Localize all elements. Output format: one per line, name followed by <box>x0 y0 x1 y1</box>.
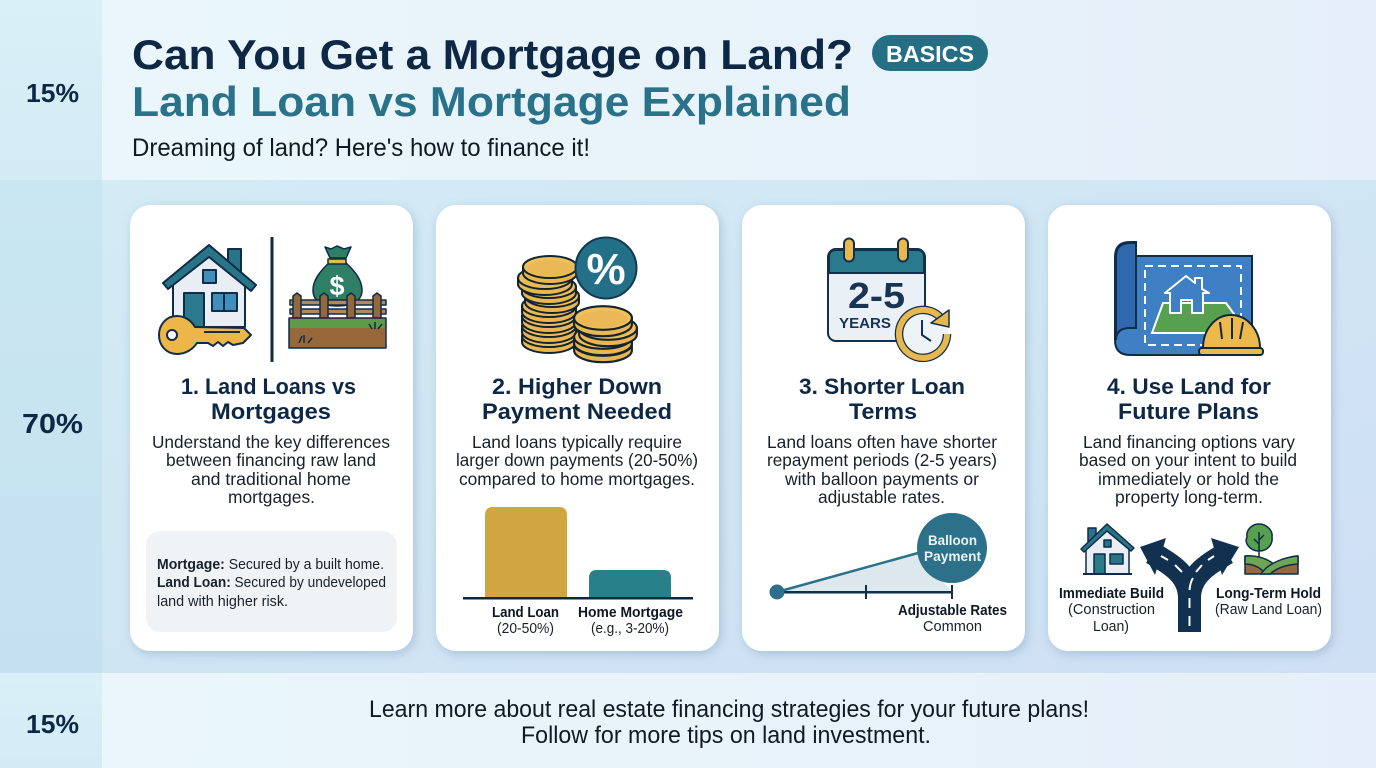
label: long-term hold <box>1215 586 1322 618</box>
icon: money bag on fenced land <box>289 246 386 348</box>
icon: dollar sign: $ <box>329 271 345 301</box>
icon: blueprint with hard hat <box>1115 242 1263 355</box>
bar chart <box>463 507 693 637</box>
card heading: Payment Needed <box>482 399 672 424</box>
card body text: mortgages. <box>228 487 315 507</box>
balloon payment chart <box>770 513 1007 635</box>
share label: footer 15%: 15% <box>26 709 79 739</box>
balloon payment chart: Payment <box>924 548 981 564</box>
card heading: Mortgages <box>211 399 331 424</box>
callout <box>146 531 397 632</box>
panel: land loans vs mortgages <box>130 205 413 651</box>
tagline: Dreaming of land? Here's how to finance it! <box>132 134 590 162</box>
card heading <box>1107 374 1271 424</box>
icon: tree on hills <box>1245 524 1298 574</box>
card heading: 1. Land Loans vs <box>181 374 356 399</box>
card heading: Future Plans <box>1118 399 1259 424</box>
icon: small house <box>1081 524 1134 574</box>
card heading <box>482 374 672 424</box>
card heading <box>799 374 965 424</box>
balloon payment chart: Common <box>923 619 982 635</box>
card body text: property long-term. <box>1115 487 1263 507</box>
footer text: Follow for more tips on land investment. <box>521 722 931 749</box>
icon: percent badge <box>576 238 636 298</box>
card heading: 3. Shorter Loan <box>799 374 965 399</box>
bar chart: (20-50%) <box>497 621 554 637</box>
card body text <box>456 432 698 489</box>
label: immediate build: Loan) <box>1093 619 1129 635</box>
share label: body 70%: 70% <box>22 408 83 439</box>
card body text: with balloon payments or <box>784 469 979 489</box>
panel: shorter loan terms <box>742 205 1025 651</box>
bar chart: (e.g., 3-20%) <box>591 621 669 637</box>
icon: percent badge: % <box>586 245 626 294</box>
callout: Land Loan: Secured by undeveloped <box>157 575 386 591</box>
card body text: repayment periods (2-5 years) <box>767 450 997 470</box>
card body text: larger down payments (20-50%) <box>456 450 698 470</box>
label: immediate build <box>1059 586 1164 635</box>
bar chart: Land Loan <box>492 605 559 621</box>
card body text: and traditional home <box>191 469 351 489</box>
badge: basics: BASICS <box>886 41 974 67</box>
callout: Mortgage: Secured by a built home. <box>157 557 384 573</box>
label: immediate build: (Construction <box>1068 602 1155 618</box>
card heading <box>181 374 356 424</box>
label: immediate build: Immediate Build <box>1059 586 1164 602</box>
footer text: Learn more about real estate financing strategies for your future plans! <box>369 696 1089 723</box>
card body text: adjustable rates. <box>818 487 945 507</box>
divider line <box>270 237 274 362</box>
card body text: immediately or hold the <box>1098 469 1279 489</box>
callout: land with higher risk. <box>157 594 288 610</box>
card heading: Terms <box>849 399 917 424</box>
card heading: 4. Use Land for <box>1107 374 1271 399</box>
card body text: Land loans often have shorter <box>767 432 997 452</box>
arrow: forked road <box>1140 538 1239 632</box>
label: long-term hold: (Raw Land Loan) <box>1215 602 1322 618</box>
card body text: compared to home mortgages. <box>459 469 695 489</box>
card body text: Land loans typically require <box>472 432 682 452</box>
footer text <box>369 696 1089 749</box>
card body text <box>1079 432 1297 507</box>
icon: calendar: 2-5 <box>848 275 905 316</box>
label: long-term hold: Long-Term Hold <box>1216 586 1321 602</box>
icon: house with key <box>159 245 256 354</box>
subtitle: Land Loan vs Mortgage Explained <box>132 78 851 125</box>
bar chart: Home Mortgage <box>578 605 683 621</box>
card body text: between financing raw land <box>166 450 376 470</box>
badge: basics <box>872 35 988 71</box>
card body text: based on your intent to build <box>1079 450 1297 470</box>
icon: calendar: YEARS <box>839 315 891 332</box>
icon: calendar <box>828 238 925 341</box>
panel: higher down payment <box>436 205 719 651</box>
balloon payment chart: Balloon <box>928 532 977 548</box>
title: Can You Get a Mortgage on Land? <box>132 31 853 78</box>
card body text: Understand the key differences <box>152 432 390 452</box>
share label: header 15%: 15% <box>26 78 79 108</box>
card body text <box>767 432 997 507</box>
card body text <box>152 432 390 507</box>
panel: use land for future plans <box>1048 205 1331 651</box>
icon: coin stacks <box>518 256 637 362</box>
balloon payment chart: Adjustable Rates <box>898 603 1007 619</box>
card body text: Land financing options vary <box>1083 432 1295 452</box>
icon: clock with arrow <box>898 309 949 359</box>
card heading: 2. Higher Down <box>492 374 662 399</box>
